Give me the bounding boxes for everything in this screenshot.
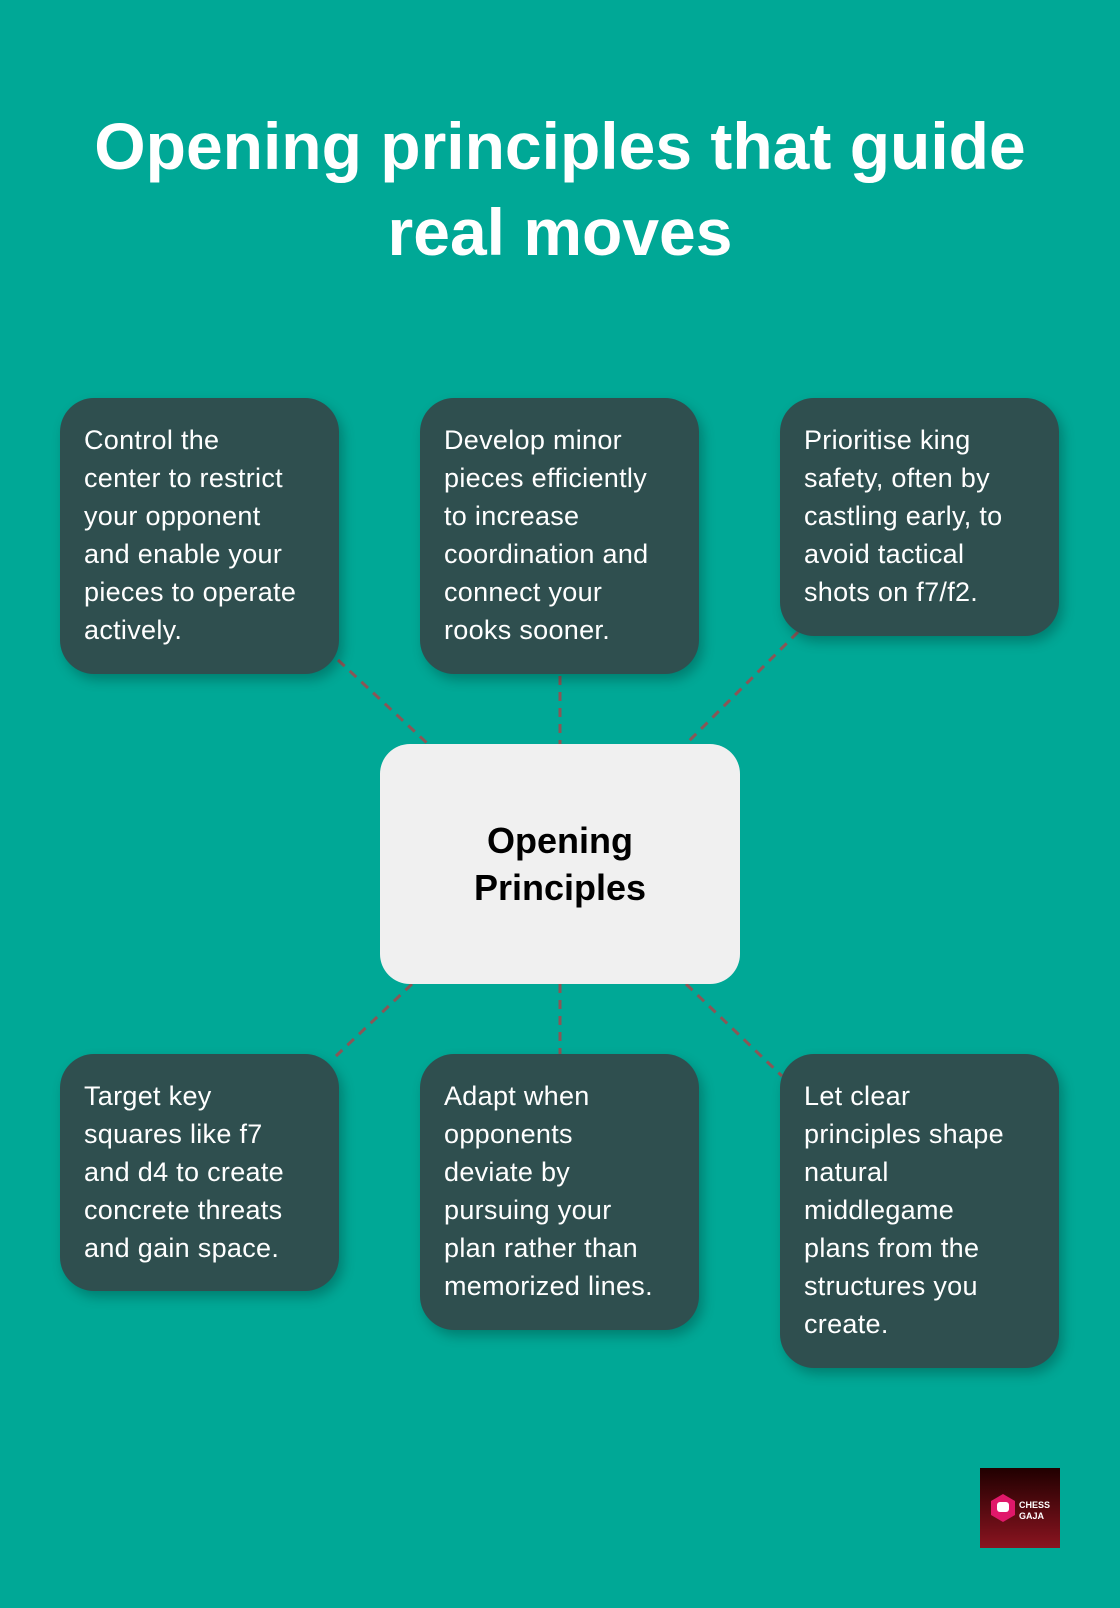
box: target squares: squares like f7 <box>84 1119 263 1149</box>
box: king safety: safety, often by <box>804 463 990 493</box>
logo: CHESS <box>1019 1500 1050 1510</box>
title: Opening principles that guide <box>94 109 1026 183</box>
box: adapt <box>420 1054 699 1330</box>
box: king safety <box>780 398 1059 636</box>
box: king safety: Prioritise king <box>804 425 971 455</box>
box: develop pieces: coordination and <box>444 539 648 569</box>
box: middlegame plans: principles shape <box>804 1119 1004 1149</box>
box: target squares: and gain space. <box>84 1233 279 1263</box>
box: develop pieces: to increase <box>444 501 579 531</box>
logo: GAJA <box>1019 1511 1045 1521</box>
box: adapt: memorized lines. <box>444 1271 653 1301</box>
box: middlegame plans: Let clear <box>804 1081 910 1111</box>
box: target squares: and d4 to create <box>84 1157 284 1187</box>
box: king safety: avoid tactical <box>804 539 964 569</box>
box: middlegame plans: create. <box>804 1309 889 1339</box>
box: adapt: pursuing your <box>444 1195 612 1225</box>
box: target squares <box>60 1054 339 1291</box>
box: develop pieces: pieces efficiently <box>444 463 647 493</box>
center node <box>380 744 740 984</box>
box: middlegame plans: natural <box>804 1157 889 1187</box>
box: develop pieces: rooks sooner. <box>444 615 610 645</box>
box: develop pieces <box>420 398 699 674</box>
center node: Principles <box>474 867 646 908</box>
box: control center: Control the <box>84 425 219 455</box>
box: adapt: Adapt when <box>444 1081 590 1111</box>
box: middlegame plans: middlegame <box>804 1195 954 1225</box>
box: control center: and enable your <box>84 539 282 569</box>
box: adapt: plan rather than <box>444 1233 638 1263</box>
box: develop pieces: Develop minor <box>444 425 622 455</box>
box: adapt: opponents <box>444 1119 573 1149</box>
box: middlegame plans <box>780 1054 1059 1368</box>
box: control center: actively. <box>84 615 182 645</box>
box: control center: your opponent <box>84 501 261 531</box>
box: middlegame plans: structures you <box>804 1271 978 1301</box>
center node: Opening <box>487 820 633 861</box>
box: control center: pieces to operate <box>84 577 296 607</box>
title <box>94 109 1026 269</box>
box: adapt: deviate by <box>444 1157 570 1187</box>
logo <box>980 1468 1060 1548</box>
box: control center: center to restrict <box>84 463 283 493</box>
box: develop pieces: connect your <box>444 577 602 607</box>
box: middlegame plans: plans from the <box>804 1233 979 1263</box>
title: real moves <box>388 195 732 269</box>
box: king safety: castling early, to <box>804 501 1002 531</box>
box: control center <box>60 398 339 674</box>
box: target squares: concrete threats <box>84 1195 282 1225</box>
box: king safety: shots on f7/f2. <box>804 577 978 607</box>
box: target squares: Target key <box>84 1081 212 1111</box>
